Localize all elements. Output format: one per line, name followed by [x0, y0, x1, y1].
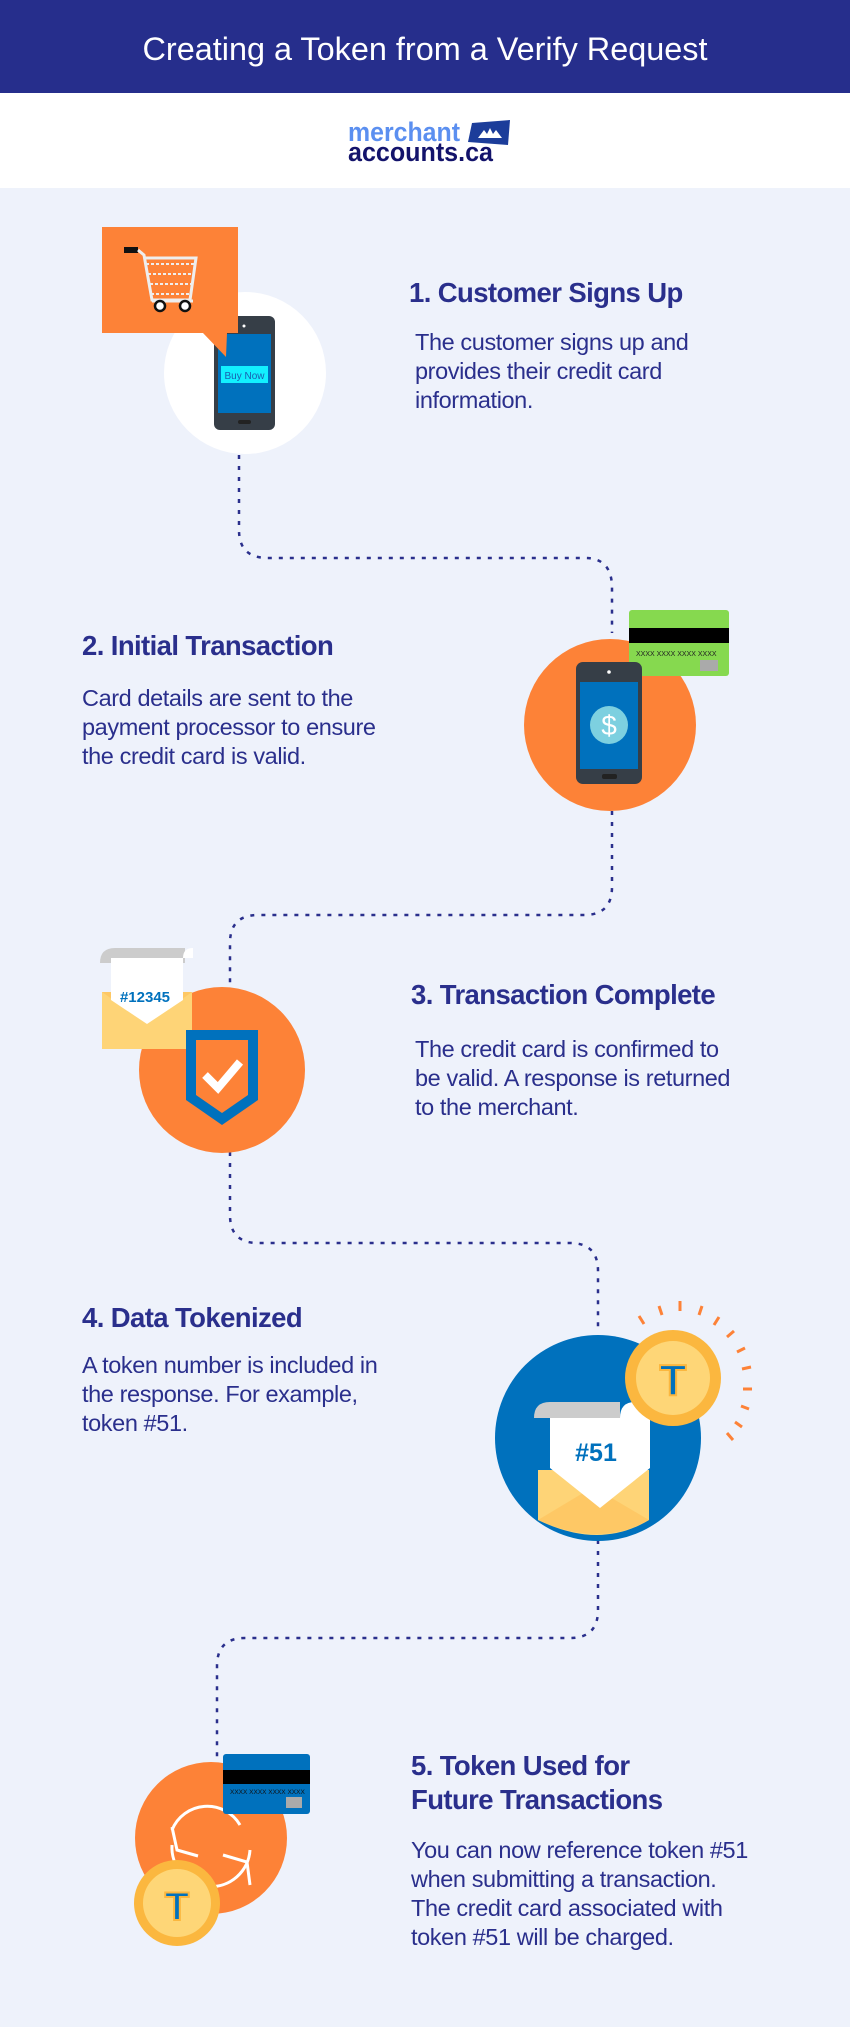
credit card green: XXXX XXXX XXXX XXXX: [636, 651, 717, 658]
step 3 icon: [100, 948, 305, 1153]
step 3 body: to the merchant.: [415, 1094, 578, 1120]
envelope with receipt: [100, 948, 193, 1049]
phone: [576, 662, 642, 784]
speech bubble cart: [102, 227, 238, 357]
step 2 icon: [524, 610, 729, 811]
credit card green: [629, 610, 729, 676]
step 1 body: information.: [415, 387, 533, 413]
step 4 body: token #51.: [82, 1410, 188, 1436]
logo: merchant: [348, 117, 460, 147]
logo band: [0, 93, 850, 188]
envelope #51: #51: [575, 1439, 617, 1467]
envelope with receipt: #12345: [120, 989, 170, 1006]
coin T: T: [165, 1885, 189, 1929]
step 5 body: token #51 will be charged.: [411, 1924, 674, 1950]
step 4 body: A token number is included in: [82, 1352, 377, 1378]
step 1 body: The customer signs up and: [415, 329, 688, 355]
blue card: XXXX XXXX XXXX XXXX: [230, 1789, 305, 1796]
dotted connector path: [217, 455, 612, 1760]
step 3 body: The credit card is confirmed to: [415, 1036, 719, 1062]
phone: Buy Now: [224, 371, 265, 382]
step 4 body: the response. For example,: [82, 1381, 358, 1407]
blue card: [223, 1754, 310, 1814]
title: Creating a Token from a Verify Request: [142, 31, 708, 67]
step 1 body: provides their credit card: [415, 358, 662, 384]
step 2 body: Card details are sent to the: [82, 685, 353, 711]
step 2 body: the credit card is valid.: [82, 743, 306, 769]
step 5 icon: [134, 1754, 310, 1946]
phone: [214, 316, 275, 430]
step 4 heading: 4. Data Tokenized: [82, 1302, 302, 1333]
step 2 body: payment processor to ensure: [82, 714, 376, 740]
coin T: [625, 1301, 752, 1440]
shield check: [186, 1030, 258, 1125]
step 5 heading: 5. Token Used for: [411, 1750, 630, 1781]
step 1 heading: 1. Customer Signs Up: [409, 277, 683, 308]
step 2 heading: 2. Initial Transaction: [82, 630, 333, 661]
step 4 icon: [495, 1301, 752, 1541]
coin T: [134, 1860, 220, 1946]
step 5 body: The credit card associated with: [411, 1895, 723, 1921]
step 5 body: You can now reference token #51: [411, 1837, 748, 1863]
header bar: [0, 0, 850, 93]
step 3 heading: 3. Transaction Complete: [411, 979, 715, 1010]
logo: [348, 117, 510, 167]
logo: accounts.ca: [348, 137, 494, 167]
coin T: T: [660, 1356, 687, 1405]
phone: $: [601, 710, 617, 741]
step 5 body: when submitting a transaction.: [410, 1866, 716, 1892]
step 3 body: be valid. A response is returned: [415, 1065, 730, 1091]
step 5 heading: Future Transactions: [411, 1784, 663, 1815]
step 1 icon: [102, 227, 326, 454]
refresh arrows: [172, 1806, 250, 1887]
envelope #51: [534, 1402, 650, 1535]
